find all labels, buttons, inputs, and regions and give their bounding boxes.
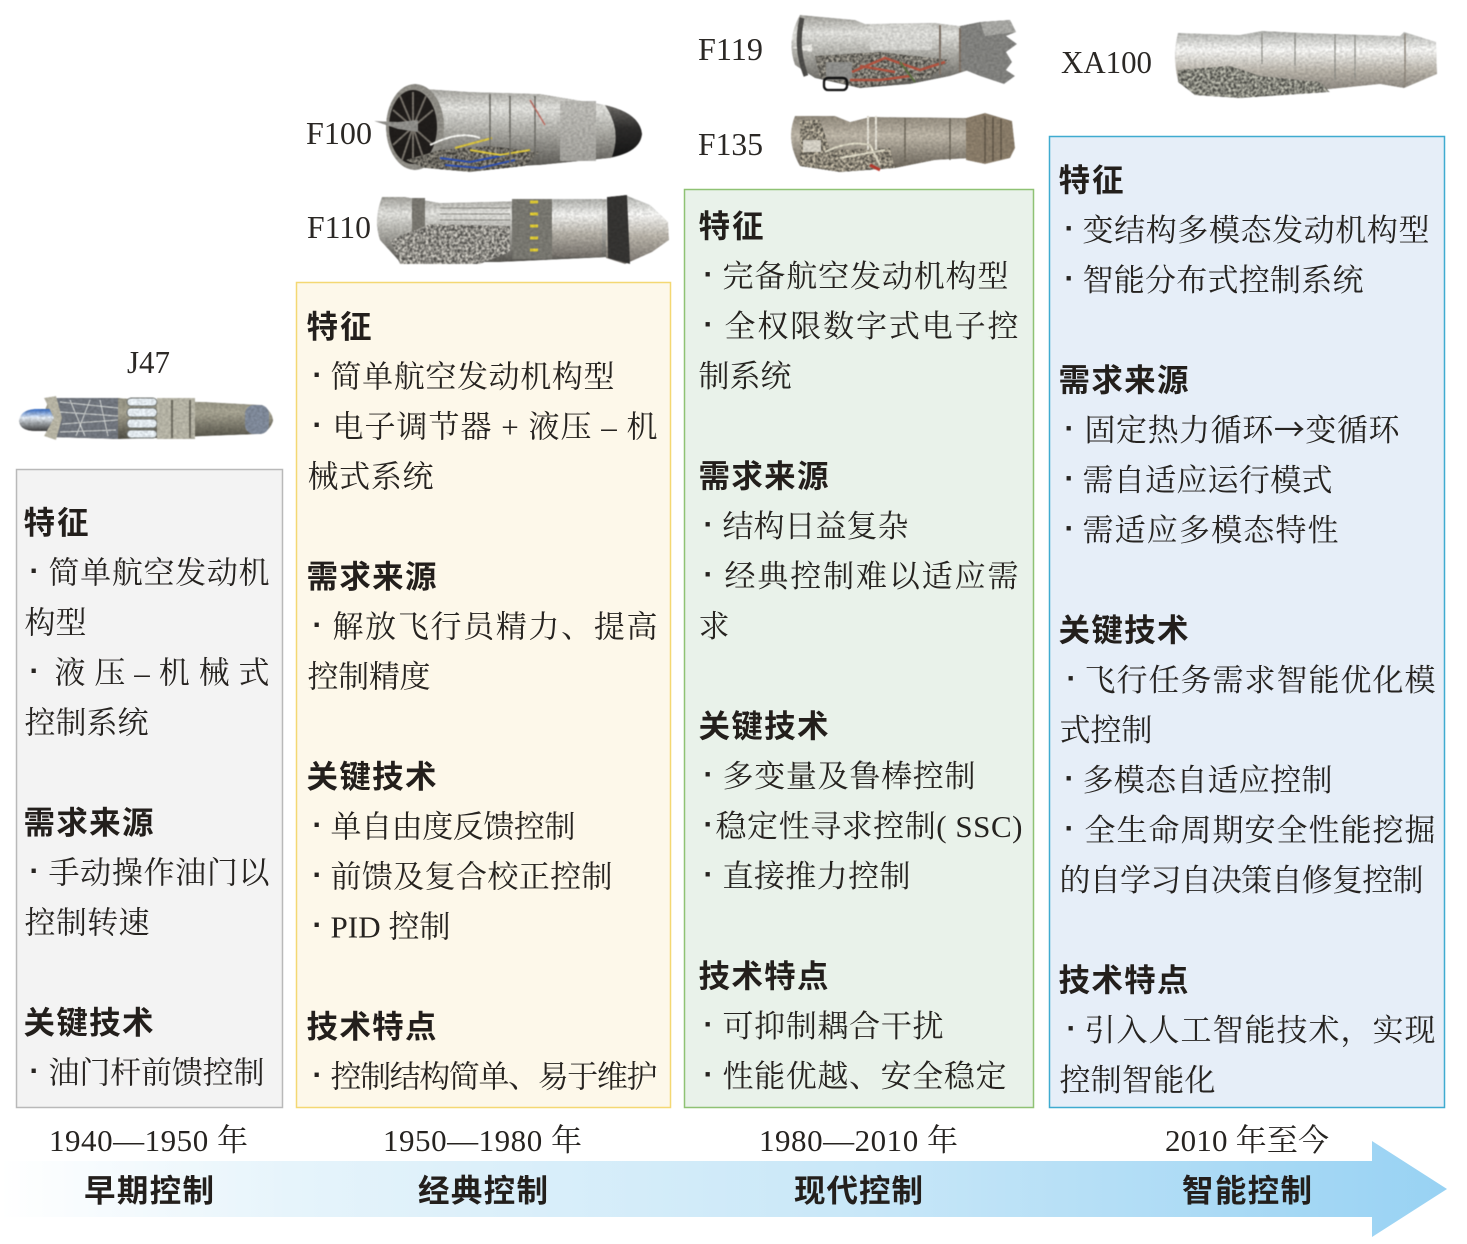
engine: F110 — [377, 195, 669, 264]
section: 关键技术: 稳定性寻求控制( SSC) — [716, 809, 1022, 844]
section: 关键技术: · — [30, 1054, 40, 1088]
section: 特征: 简单航空发动机 — [48, 556, 270, 590]
stage label: 智能控制: 智能控制 — [1182, 1172, 1312, 1208]
section: 技术特点: 技术特点 — [306, 1008, 436, 1044]
section: 特征: 液压–机械式 — [54, 656, 270, 690]
section: 需求来源: · — [704, 558, 714, 591]
section: 需求来源: 固定热力循环→变循环 — [1084, 405, 1400, 450]
date: 1950—1980 年: 1950—1980 年 — [383, 1123, 582, 1158]
section: 特征: · — [312, 408, 322, 442]
section: 技术特点: 性能优越、安全稳定 — [722, 1059, 1006, 1094]
section: 技术特点 — [1058, 962, 1436, 1098]
section: 特征: · — [30, 554, 40, 588]
section: 需求来源: 需求来源 — [698, 458, 828, 494]
arrow: timeline — [0, 1141, 1447, 1237]
section: 关键技术: · — [312, 908, 322, 942]
date: 2010 年至今: 2010 年至今 — [1165, 1123, 1329, 1158]
section: 需求来源: 控制转速 — [24, 906, 150, 940]
section: 特征: 变结构多模态发动机构型 — [1082, 213, 1430, 248]
section: 需求来源: 控制精度 — [308, 660, 430, 694]
section: 需求来源: · — [312, 608, 322, 642]
engine: J47 — [19, 396, 273, 440]
section: 关键技术 — [698, 708, 1022, 894]
section: 特征 — [1058, 162, 1430, 298]
section: 特征: 简单航空发动机构型 — [330, 360, 614, 394]
label: F100: F100 — [306, 115, 372, 151]
section: 特征: · — [30, 654, 40, 688]
section: 特征: · — [1064, 212, 1074, 245]
section: 技术特点: 控制智能化 — [1060, 1063, 1216, 1098]
engine: F100 — [374, 84, 642, 172]
section: 技术特点: · — [704, 1008, 714, 1041]
section: 需求来源: 经典控制难以适应需 — [724, 559, 1018, 594]
section: 需求来源: 需求来源 — [24, 804, 154, 840]
stage label: 经典控制: 经典控制 — [418, 1172, 548, 1208]
section: 关键技术: 关键技术 — [306, 758, 436, 794]
panel: 现代控制 — [684, 190, 1034, 1108]
section: 技术特点 — [306, 1008, 658, 1094]
section: 特征: 控制系统 — [24, 706, 148, 740]
section: 关键技术 — [306, 758, 612, 944]
label: J47: J47 — [127, 344, 170, 380]
section: 需求来源: 求 — [698, 609, 730, 644]
section: 需求来源: 结构日益复杂 — [722, 509, 908, 544]
section: 需求来源 — [1058, 362, 1400, 548]
section: 关键技术: · — [1064, 762, 1074, 795]
panel: 经典控制 — [296, 282, 670, 1108]
section: 关键技术: · — [1064, 812, 1074, 845]
stage label: 早期控制: 早期控制 — [84, 1172, 214, 1208]
section: 特征: · — [312, 358, 322, 392]
section: 技术特点: 引入人工智能技术，实现 — [1084, 1013, 1436, 1048]
section: 技术特点: 技术特点 — [1058, 962, 1188, 998]
section: 特征: · — [1064, 262, 1074, 295]
section: 关键技术: · — [312, 808, 322, 842]
section: 关键技术: 单自由度反馈控制 — [330, 810, 576, 844]
section: 关键技术: · — [1066, 662, 1076, 695]
label: XA100: XA100 — [1061, 44, 1152, 80]
section: 关键技术 — [1058, 612, 1436, 898]
date: 1940—1950 年: 1940—1950 年 — [49, 1123, 248, 1158]
section: 需求来源: · — [1064, 412, 1074, 445]
section: 关键技术: 式控制 — [1060, 713, 1152, 748]
engine: XA100 — [1175, 31, 1437, 98]
section: 特征 — [24, 504, 270, 740]
section: 关键技术: · — [704, 858, 714, 891]
section: 技术特点 — [698, 958, 1006, 1094]
section: 关键技术: PID 控制 — [330, 910, 450, 944]
section: 关键技术: 关键技术 — [24, 1004, 154, 1040]
section: 需求来源: 手动操作油门以 — [48, 856, 272, 890]
label: F135: F135 — [698, 126, 763, 162]
section: 关键技术: 飞行任务需求智能优化模 — [1084, 663, 1436, 698]
section: 需求来源 — [24, 804, 272, 940]
section: 特征: 电子调节器 + 液压 – 机 — [332, 410, 658, 444]
section: 特征: · — [704, 308, 714, 341]
section: 关键技术: · — [704, 808, 714, 841]
section: 需求来源: · — [30, 854, 40, 888]
engine: F119 — [791, 15, 1017, 90]
section: 关键技术: 关键技术 — [698, 708, 828, 744]
section: 特征: 特征 — [1058, 162, 1124, 198]
section: 特征 — [698, 208, 1018, 394]
section: 关键技术: 的自学习自决策自修复控制 — [1060, 863, 1424, 898]
section: 关键技术: 关键技术 — [1058, 612, 1188, 648]
section: 关键技术: 多模态自适应控制 — [1082, 763, 1332, 798]
section: 特征: · — [704, 258, 714, 291]
section: 特征: 全权限数字式电子控 — [724, 309, 1018, 344]
section: 关键技术: · — [704, 758, 714, 791]
section: 技术特点: · — [1066, 1012, 1076, 1045]
section: 特征: 构型 — [24, 606, 86, 640]
section: 需求来源: · — [1064, 462, 1074, 495]
section: 技术特点: 控制结构简单、易于维护 — [330, 1060, 658, 1094]
section: 需求来源: · — [704, 508, 714, 541]
section: 需求来源 — [306, 558, 658, 694]
section: 需求来源: 需适应多模态特性 — [1082, 513, 1338, 548]
section: 需求来源: 需求来源 — [1058, 362, 1188, 398]
date: 1980—2010 年: 1980—2010 年 — [759, 1123, 958, 1158]
stage label: 现代控制: 现代控制 — [794, 1172, 923, 1208]
section: 关键技术: · — [312, 858, 322, 892]
section: 特征: 制系统 — [698, 359, 792, 394]
section: 关键技术: 多变量及鲁棒控制 — [722, 759, 976, 794]
section: 特征: 特征 — [24, 504, 88, 540]
section: 特征: 械式系统 — [308, 460, 434, 494]
engine: F135 — [791, 113, 1015, 172]
section: 需求来源: · — [1064, 512, 1074, 545]
panel: 智能控制 — [1050, 136, 1444, 1108]
section: 技术特点: 可抑制耦合干扰 — [722, 1009, 944, 1044]
section: 特征: 特征 — [698, 208, 764, 244]
section: 技术特点: · — [704, 1058, 714, 1091]
section: 关键技术: 直接推力控制 — [722, 859, 910, 894]
section: 特征 — [306, 308, 658, 494]
panel: 早期控制 — [16, 470, 282, 1108]
section: 关键技术: 全生命周期安全性能挖掘 — [1084, 813, 1436, 848]
section: 关键技术: 前馈及复合校正控制 — [330, 860, 612, 894]
label: F119: F119 — [698, 31, 763, 67]
section: 需求来源 — [698, 458, 1018, 644]
section: 关键技术 — [24, 1004, 264, 1090]
section: 特征: 特征 — [306, 308, 372, 344]
section: 关键技术: 油门杆前馈控制 — [48, 1056, 264, 1090]
section: 技术特点: 技术特点 — [698, 958, 828, 994]
section: 特征: 智能分布式控制系统 — [1082, 263, 1364, 298]
label: F110: F110 — [307, 209, 371, 245]
section: 技术特点: · — [312, 1058, 322, 1092]
section: 需求来源: 解放飞行员精力、提高 — [332, 610, 658, 644]
section: 特征: 完备航空发动机构型 — [722, 259, 1008, 294]
section: 需求来源: 需自适应运行模式 — [1082, 463, 1332, 498]
section: 需求来源: 需求来源 — [306, 558, 436, 594]
